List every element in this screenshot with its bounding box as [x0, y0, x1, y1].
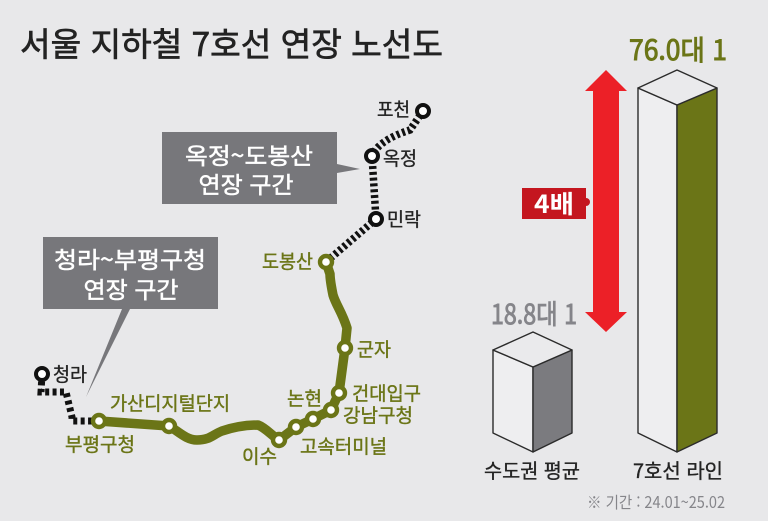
station labels: existing: 도봉산 — [262, 251, 313, 273]
station labels: extension — [53, 99, 421, 386]
station labels: existing: 가산디지털단지 — [110, 393, 230, 415]
callout: Okjeong extension: 연장 구간 — [198, 166, 294, 200]
value: capital area average: 18.8대 1 — [491, 293, 577, 332]
station labels: existing: 건대입구 — [352, 383, 421, 405]
extension stations — [36, 105, 429, 380]
label: capital area average: 수도권 평균 — [484, 455, 580, 484]
extension dashes north — [326, 111, 423, 262]
bar chart: competition ratio — [484, 29, 727, 513]
callout: Cheongna extension — [43, 237, 218, 397]
station labels: existing: 군자 — [357, 339, 391, 361]
title: 서울 지하철 7호선 연장 노선도 — [20, 18, 443, 66]
callout: Cheongna extension: 연장 구간 — [84, 271, 178, 305]
station labels: extension: 옥정 — [383, 148, 417, 170]
label: line 7: 7호선 라인 — [633, 455, 723, 484]
callout: Okjeong extension — [162, 132, 360, 204]
station labels: existing: 논현 — [287, 388, 322, 410]
station labels: existing: 강남구청 — [343, 405, 413, 427]
station labels: existing: 고속터미널 — [300, 436, 387, 458]
station labels: existing: 부평구청 — [65, 434, 135, 456]
existing stations — [93, 256, 351, 446]
station labels: extension: 청라 — [53, 364, 87, 386]
route map — [36, 99, 429, 468]
bar: line 7 — [638, 70, 717, 452]
station labels: existing: 이수 — [242, 446, 277, 468]
badge: 4 times: 4배 — [534, 185, 574, 221]
callout: Okjeong extension: 옥정~도봉산 — [185, 137, 313, 171]
extension dashes west — [41, 374, 99, 421]
footnote: period: ※ 기간 : 24.01~25.02 — [587, 489, 725, 513]
station labels: extension: 민락 — [387, 209, 421, 231]
badge: 4 times — [522, 185, 590, 221]
station labels: existing — [65, 251, 421, 468]
double arrow — [585, 70, 627, 332]
bar: capital area average — [493, 332, 572, 452]
callout: Cheongna extension: 청라~부평구청 — [54, 241, 206, 275]
value: line 7: 76.0대 1 — [629, 29, 727, 69]
station labels: extension: 포천 — [377, 99, 410, 121]
existing line 7 route — [99, 262, 347, 440]
